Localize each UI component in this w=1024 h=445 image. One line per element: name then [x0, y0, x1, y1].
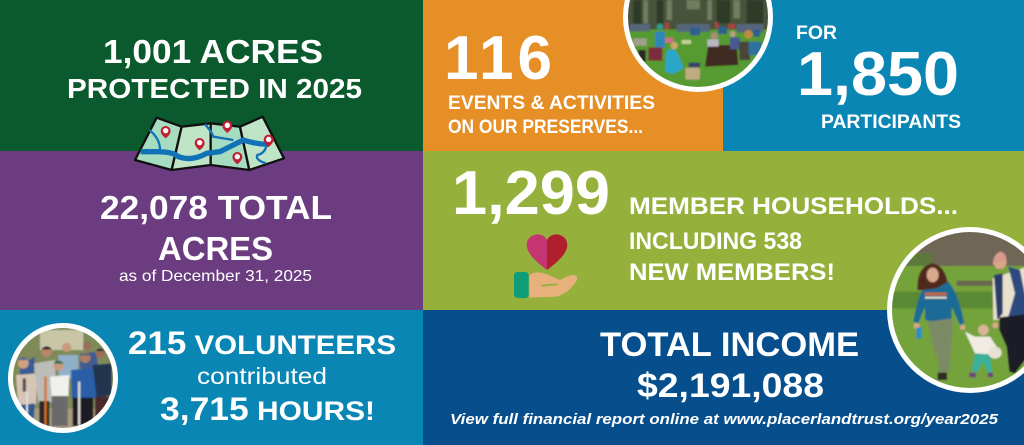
- heading: 22,078 total: 22,078 TOTAL: [100, 189, 332, 226]
- stat: 1,299: 1,299: [452, 159, 610, 228]
- panel: participants: [723, 0, 1024, 151]
- text: participants: PARTICIPANTS: [821, 112, 961, 133]
- text: 3,715 hours: 3,715 HOURS!: [160, 391, 375, 427]
- text: contributed: contributed: [197, 363, 327, 389]
- heading: total income: TOTAL INCOME: [600, 326, 859, 364]
- stat: income amount: $2,191,088: [637, 367, 824, 405]
- panel: income: [423, 310, 1024, 445]
- heading: 1,001 acres: 1,001 ACRES: [103, 33, 323, 70]
- text: as of date: as of December 31, 2025: [119, 268, 312, 285]
- text: events and activities: EVENTS & ACTIVITIES: [448, 93, 655, 114]
- panel: events: [423, 0, 723, 151]
- heading: acres: ACRES: [158, 230, 273, 267]
- text: new members: NEW MEMBERS!: [629, 259, 835, 286]
- text: including 538: INCLUDING 538: [629, 228, 802, 255]
- text: report link: View full financial report online at www.placerlandtrust.org/year2025: [450, 411, 999, 428]
- panel: total acres: [0, 151, 423, 310]
- heading: protected in 2025: PROTECTED IN 2025: [67, 73, 362, 104]
- icon: heart in hand: [514, 234, 577, 298]
- text: on our preserves: ON OUR PRESERVES...: [448, 117, 643, 138]
- text: 215 volunteers: 215 VOLUNTEERS: [128, 325, 396, 361]
- stat: 1,850: 1,850: [797, 40, 959, 109]
- icon: map: [135, 117, 284, 170]
- photo: volunteers: [8, 323, 118, 433]
- panel: members: [423, 151, 1024, 310]
- panel: acres protected: [0, 0, 423, 151]
- panel: volunteers: [0, 310, 423, 445]
- stat: 116: 116: [444, 24, 552, 93]
- photo: event on preserve: [623, 0, 773, 92]
- text: member households: MEMBER HOUSEHOLDS...: [629, 193, 958, 220]
- text: for: FOR: [796, 23, 837, 44]
- photo: family walking: [887, 227, 1024, 393]
